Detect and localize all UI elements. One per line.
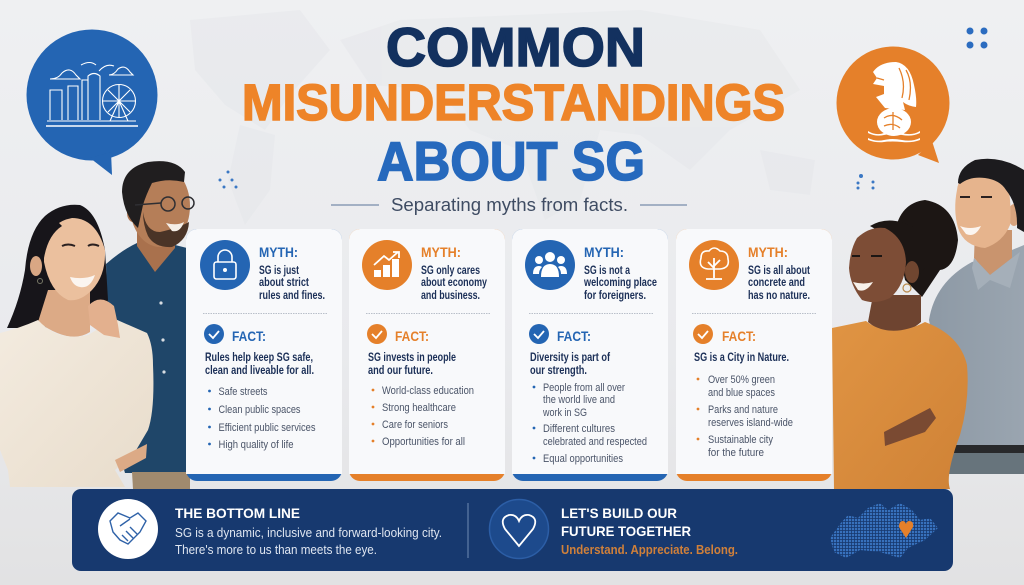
fact text: and our future. xyxy=(368,365,433,377)
myth text: MYTH: xyxy=(584,244,624,260)
fact list: World-class education xyxy=(382,385,474,397)
fact text xyxy=(530,352,610,377)
decorative dots xyxy=(218,28,988,190)
fact list: Different cultures xyxy=(543,423,615,435)
icon: growth chart xyxy=(362,240,412,290)
fact heading: FACT: xyxy=(557,328,591,344)
myth text: SG is not a xyxy=(584,265,630,277)
call to action: Understand. Appreciate. Belong. xyxy=(561,543,738,557)
myth text xyxy=(583,244,657,302)
fact text: Rules help keep SG safe, xyxy=(205,352,313,364)
fact list: People from all over xyxy=(543,382,625,394)
title: ABOUT SG xyxy=(377,130,645,192)
icon: lock xyxy=(200,240,250,290)
fact text: Diversity is part of xyxy=(530,352,610,364)
myth text: concrete and xyxy=(748,277,805,289)
fact list: Equal opportunities xyxy=(543,453,623,465)
myth text: welcoming place xyxy=(583,277,657,289)
myth text xyxy=(421,244,487,302)
fact list: Care for seniors xyxy=(382,419,448,431)
fact text xyxy=(205,352,314,377)
fact list: Sustainable city xyxy=(708,434,773,446)
fact text: SG is a City in Nature. xyxy=(694,352,789,364)
fact list: High quality of life xyxy=(218,439,294,451)
bottom line text: There's more to us than meets the eye. xyxy=(175,543,377,557)
speech bubble: Merlion xyxy=(836,46,950,163)
fact heading xyxy=(529,324,591,344)
fact list: and blue spaces xyxy=(708,387,775,399)
call to action: LET'S BUILD OUR xyxy=(561,505,677,521)
myth text xyxy=(748,244,810,302)
fact list: Efficient public services xyxy=(218,422,316,434)
bottom line text xyxy=(175,505,442,557)
fact list: for the future xyxy=(708,447,764,459)
myth text: MYTH: xyxy=(748,244,788,260)
fact list: Parks and nature xyxy=(708,404,778,416)
fact heading xyxy=(204,324,266,344)
person: man in grey shirt xyxy=(929,159,1024,474)
myth text: SG is all about xyxy=(748,265,810,277)
fact list: Over 50% green xyxy=(708,374,775,386)
myth text: MYTH: xyxy=(421,244,461,260)
bottom line text: SG is a dynamic, inclusive and forward-looking city. xyxy=(175,526,442,540)
fact heading: FACT: xyxy=(722,328,756,344)
call to action xyxy=(561,505,738,557)
fact list: reserves island-wide xyxy=(708,417,793,429)
myth text: about strict xyxy=(259,277,309,289)
fact list xyxy=(372,385,474,448)
fact list xyxy=(697,374,793,459)
call to action: FUTURE TOGETHER xyxy=(561,523,691,539)
fact text: our strength. xyxy=(530,365,587,377)
icon: handshake xyxy=(98,499,158,559)
person: man with glasses xyxy=(106,161,195,489)
fact list xyxy=(208,386,316,451)
card 4: concrete and nature xyxy=(676,229,832,481)
fact list: the world live and xyxy=(543,394,615,406)
myth text: for foreigners. xyxy=(584,290,646,302)
myth text: rules and fines. xyxy=(259,290,325,302)
myth text: MYTH: xyxy=(259,244,298,260)
speech bubble: Singapore skyline xyxy=(26,30,158,175)
card 2: economy and business xyxy=(349,229,505,481)
title xyxy=(242,16,785,192)
fact heading: FACT: xyxy=(395,328,429,344)
person: woman in cream sweater xyxy=(0,205,153,487)
myth text: has no nature. xyxy=(748,290,810,302)
fact text xyxy=(368,352,456,377)
myth text: SG only cares xyxy=(421,265,480,277)
fact list: Opportunities for all xyxy=(382,436,465,448)
icon: people xyxy=(525,240,575,290)
myth text: about economy xyxy=(421,277,487,289)
title: MISUNDERSTANDINGS xyxy=(242,74,785,131)
bottom line text: THE BOTTOM LINE xyxy=(175,505,300,521)
fact text: clean and liveable for all. xyxy=(205,365,314,377)
fact heading: FACT: xyxy=(232,328,266,344)
fact list: Strong healthcare xyxy=(382,402,456,414)
fact text: SG invests in people xyxy=(368,352,456,364)
bottom banner xyxy=(72,489,953,571)
myth text: SG is just xyxy=(259,265,299,277)
fact heading xyxy=(367,324,429,344)
person: woman in orange sweater xyxy=(832,200,968,489)
myth text xyxy=(259,244,325,302)
fact list: Clean public spaces xyxy=(218,404,301,416)
icon: Merlion xyxy=(868,62,920,142)
card 3: welcoming place xyxy=(512,229,668,481)
fact list xyxy=(533,382,647,465)
icon: heart xyxy=(490,500,548,558)
map of Singapore xyxy=(830,503,938,558)
title: COMMON xyxy=(386,16,645,78)
fact heading xyxy=(693,324,756,344)
fact list: celebrated and respected xyxy=(543,436,647,448)
card 1: strict rules xyxy=(186,229,342,481)
icon: skyline xyxy=(46,62,138,126)
fact list: work in SG xyxy=(542,407,587,419)
subtitle: Separating myths from facts. xyxy=(391,195,628,215)
icon: tree xyxy=(689,240,739,290)
fact list: Safe streets xyxy=(218,386,268,398)
myth text: and business. xyxy=(421,290,480,302)
